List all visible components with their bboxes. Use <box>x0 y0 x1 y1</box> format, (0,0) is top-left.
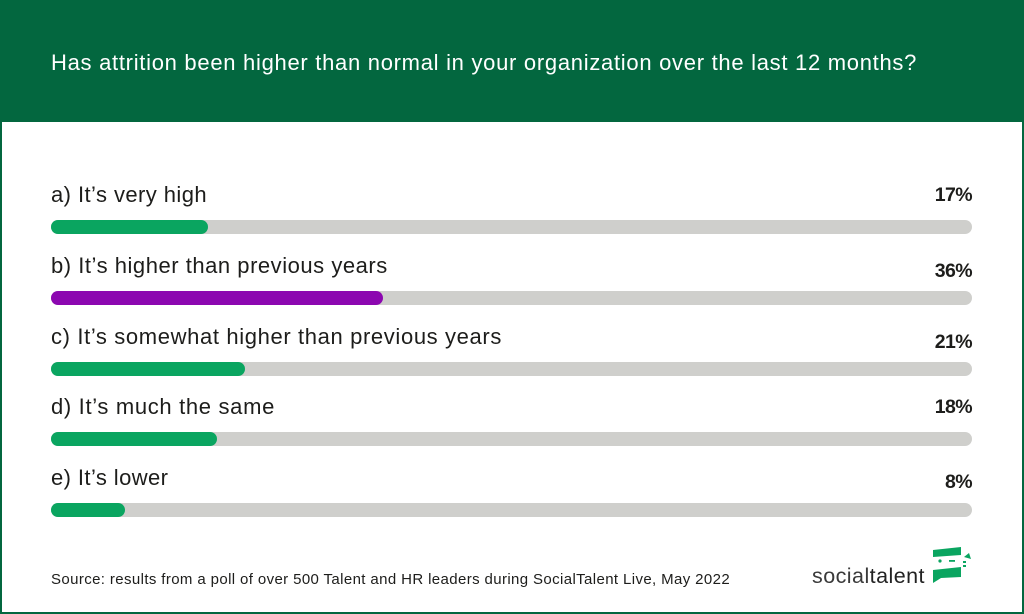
row d label: d) It’s much the same <box>51 394 275 419</box>
row d bar <box>51 432 972 446</box>
row b label: b) It’s higher than previous years <box>51 253 388 278</box>
header band <box>0 0 1024 122</box>
source note: Source: results from a poll of over 500 Talent and HR leaders during SocialTalent Live, May 2022 <box>51 571 730 588</box>
row e value: 8% <box>945 471 972 493</box>
row b bar <box>51 291 972 305</box>
row a value: 17% <box>935 184 972 206</box>
title: Has attrition been higher than normal in your organization over the last 12 months? <box>51 50 917 75</box>
row e bar <box>51 503 972 517</box>
logo wordmark: socialtalent <box>812 564 925 588</box>
row e label: e) It’s lower <box>51 465 168 490</box>
icon: socialtalent logo <box>933 547 971 583</box>
row a label: a) It’s very high <box>51 182 207 207</box>
row a bar <box>51 220 972 234</box>
row d value: 18% <box>935 396 972 418</box>
row c bar <box>51 362 972 376</box>
row c label: c) It’s somewhat higher than previous years <box>51 324 502 349</box>
row b value: 36% <box>935 260 972 282</box>
row c value: 21% <box>935 331 972 353</box>
